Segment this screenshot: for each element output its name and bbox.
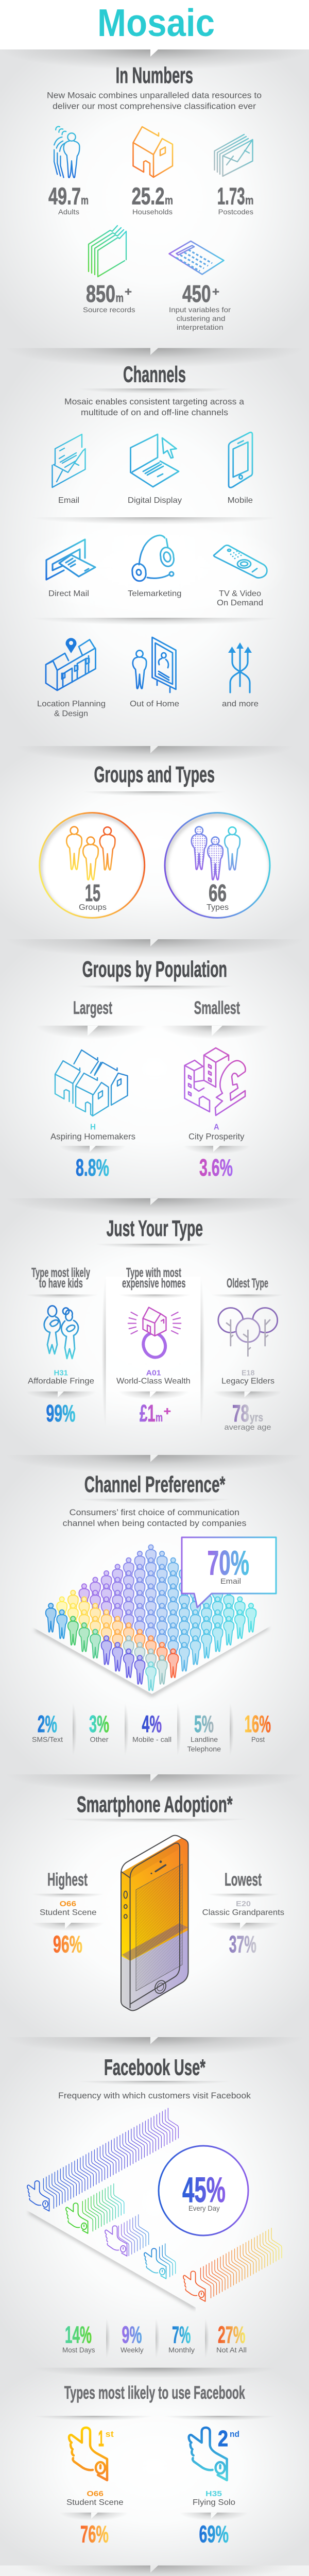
stat: source records <box>83 280 135 314</box>
code: h: H <box>90 1123 96 1132</box>
panel: just your type <box>0 1198 309 1455</box>
code: a01: A01 <box>146 1369 161 1378</box>
subheading <box>31 1266 90 1291</box>
subheading <box>122 1266 185 1291</box>
stat: households: Households <box>132 208 173 216</box>
label: tv and video on demand: TV & Video <box>219 589 261 598</box>
icon: three dotted people <box>192 827 240 880</box>
icon: thumb up blue <box>189 2428 227 2480</box>
subheading: Oldest Type <box>227 1276 268 1291</box>
number: 66: 66 <box>209 879 227 906</box>
label: tv and video on demand: On Demand <box>217 599 263 607</box>
rank: 2nd: 2 <box>218 2426 228 2451</box>
stat: adults: Adults <box>58 208 79 216</box>
panel: groups and types <box>0 746 309 940</box>
column: most expensive homes <box>116 1266 191 1427</box>
stat: source records: Source records <box>83 306 135 314</box>
intro text: channel when being contacted by companies <box>63 1518 246 1528</box>
stat: sms <box>32 1710 63 1743</box>
name: student scene: Student Scene <box>66 2498 124 2507</box>
title: Mosaic <box>97 1 215 44</box>
intro text: Frequency with which customers visit Facebook <box>58 2091 251 2100</box>
stat: not at all <box>216 2321 247 2354</box>
icon: household <box>133 127 173 177</box>
stat: mobile call: Mobile - call <box>132 1735 171 1743</box>
icon: folders <box>89 226 126 277</box>
intro text: New Mosaic combines unparalleled data resources to <box>47 91 262 100</box>
value: 99 percent: 99% <box>46 1400 75 1427</box>
icon: telemarketing <box>132 535 174 581</box>
stat: sms: 2% <box>38 1710 57 1737</box>
icon: direct mail <box>46 539 95 580</box>
icon: email <box>53 434 85 487</box>
stat: households: 25.2 <box>132 183 165 210</box>
value: 78 years: yrs <box>250 1411 263 1424</box>
code: h31: H31 <box>54 1369 68 1378</box>
stat: most days: 14% <box>65 2321 92 2348</box>
label: direct mail: Direct Mail <box>48 589 89 598</box>
icon: house on a ring <box>128 1308 181 1361</box>
subheading: lowest: Lowest <box>225 1870 262 1890</box>
subheading: Type most likely <box>31 1266 90 1280</box>
icon: three people <box>66 827 115 880</box>
column: largest <box>36 998 148 1181</box>
label: mobile: Mobile <box>228 496 253 505</box>
name: flying solo: Flying Solo <box>193 2498 235 2507</box>
value: 69 percent: 69% <box>199 2521 229 2548</box>
header: white title band <box>0 0 309 49</box>
label: location planning and design <box>37 700 106 718</box>
intro text: deliver our most comprehensive classification ever <box>53 101 256 111</box>
code: e18: E18 <box>242 1369 254 1378</box>
icon: digital display <box>131 434 179 487</box>
stat: source records: + <box>125 285 132 298</box>
intro text <box>47 91 262 111</box>
code: h35: H35 <box>205 2489 222 2498</box>
label: telemarketing: Telemarketing <box>128 589 181 598</box>
number: 15: 15 <box>85 879 100 906</box>
label: out of home: Out of Home <box>130 700 179 708</box>
value: 37 percent: 37% <box>229 1930 256 1957</box>
label: location planning and design: Location Planning <box>37 700 106 708</box>
panel: in numbers <box>0 49 309 348</box>
stat: other <box>89 1710 109 1743</box>
heading: channels: Channels <box>123 362 186 387</box>
name: affordable fringe: Affordable Fringe <box>28 1377 94 1386</box>
label: average age: average age <box>225 1423 271 1432</box>
stat: input variables: clustering and <box>176 314 226 323</box>
subheading: expensive homes <box>122 1276 185 1291</box>
stat: monthly <box>168 2321 195 2354</box>
panel: source note band <box>0 2566 309 2576</box>
stat: adults: 49.7 <box>48 183 81 210</box>
icon: calculator <box>169 241 224 274</box>
stat: input variables: 450 <box>182 280 211 307</box>
stat: most days <box>62 2321 95 2354</box>
code: o66: O66 <box>87 2489 104 2498</box>
icon: houses <box>55 1050 128 1116</box>
stat: postcodes <box>217 183 253 216</box>
subheading: smallest: Smallest <box>194 998 240 1018</box>
chart: every day thumbs bar <box>27 2108 178 2211</box>
name: student scene: Student Scene <box>40 1908 97 1917</box>
stat: landline <box>187 1710 221 1753</box>
label: email: Email <box>58 496 79 505</box>
stat: landline: Landline <box>191 1735 218 1743</box>
stat: post: Post <box>251 1735 265 1743</box>
icon: envelopes <box>214 134 252 176</box>
value: 96 percent: 96% <box>53 1930 82 1957</box>
stat: input variables: + <box>212 285 219 298</box>
stat: monthly: Monthly <box>168 2346 195 2354</box>
icon: adults <box>54 127 79 178</box>
label: location planning and design: & Design <box>54 709 88 718</box>
rank: 2nd: nd <box>230 2429 239 2439</box>
intro text: Mosaic enables consistent targeting across a <box>64 397 245 406</box>
column: most likely to have kids <box>26 1266 98 1427</box>
circle: 66 types <box>165 813 271 921</box>
value: 8.8 percent: 8.8% <box>76 1154 109 1181</box>
panel: smartphone adoption <box>0 1774 309 2037</box>
rank: 2nd <box>218 2426 239 2451</box>
chart: most days thumbs bar <box>66 2184 124 2233</box>
name: aspiring homemakers: Aspiring Homemakers <box>50 1132 135 1142</box>
name: world-class wealth: World-Class Wealth <box>116 1377 191 1386</box>
stat: postcodes: 1.73 <box>217 183 245 210</box>
value: 3.6 percent: 3.6% <box>199 1154 233 1181</box>
stat: postcodes: Postcodes <box>218 208 253 216</box>
circle: 45 percent every day: Every Day <box>188 2204 220 2212</box>
stat: post <box>244 1710 271 1743</box>
stat: landline: 5% <box>194 1710 214 1737</box>
stat: other: Other <box>90 1735 109 1743</box>
stat: other: 3% <box>89 1710 109 1737</box>
column: lowest <box>202 1870 284 1957</box>
chart: weekly thumbs bar <box>105 2215 149 2256</box>
stat: not at all: Not At All <box>216 2346 247 2354</box>
value: one million plus: + <box>164 1404 171 1418</box>
code: e20: E20 <box>236 1900 251 1908</box>
heading: groups and types: Groups and Types <box>94 762 215 787</box>
name: classic grandparents: Classic Grandparents <box>202 1908 284 1917</box>
stat: source records: 850 <box>86 280 115 307</box>
chart: monthly thumbs bar <box>144 2244 176 2279</box>
column: second <box>179 2426 248 2548</box>
subheading: largest: Largest <box>73 998 112 1018</box>
subheading: highest: Highest <box>47 1870 88 1890</box>
stat: not at all: 27% <box>218 2321 245 2348</box>
intro text: multitude of on and off-line channels <box>81 408 228 417</box>
stat: mobile call <box>132 1710 171 1743</box>
stat: input variables: interpretation <box>177 323 224 331</box>
subheading: to have kids <box>39 1276 83 1291</box>
icon: mobile <box>229 432 252 487</box>
icon: city and pound sign <box>184 1048 246 1115</box>
stat: weekly: Weekly <box>121 2346 144 2354</box>
subheading: Type with most <box>126 1266 181 1280</box>
stat: most days: Most Days <box>62 2346 95 2354</box>
stat: mobile call: 4% <box>142 1710 162 1737</box>
stat: weekly: 9% <box>122 2321 142 2348</box>
intro text <box>64 397 245 417</box>
stat: households: m <box>165 194 173 207</box>
circle: 45 percent every day: 45% <box>182 2170 226 2210</box>
circle: 15 groups <box>40 813 146 921</box>
value: one million plus: £1 <box>140 1400 156 1427</box>
label: and more: and more <box>222 700 259 708</box>
column: highest <box>31 1870 105 1957</box>
callout: 70 percent email <box>182 1537 276 1607</box>
callout: 70 percent email: Email <box>220 1577 241 1586</box>
name: city prosperity: City Prosperity <box>188 1132 245 1142</box>
column: oldest type <box>211 1276 283 1432</box>
column: first <box>59 2426 128 2548</box>
stat: input variables <box>169 280 231 331</box>
intro text: Consumers’ first choice of communication <box>70 1507 239 1517</box>
icon: parents with babies <box>44 1306 78 1359</box>
panel: groups by population <box>0 939 309 1198</box>
label: groups: Groups <box>79 903 107 912</box>
icon: and more arrows <box>228 642 252 692</box>
illustration: smartphone filled by percentage <box>118 1832 191 2010</box>
stat: source records: m <box>116 291 124 304</box>
icon: trees <box>218 1308 278 1356</box>
panel: types most likely to use facebook <box>0 2368 309 2566</box>
stat: postcodes: m <box>245 194 253 207</box>
code: a: A <box>214 1123 219 1132</box>
circle: 45 percent every day <box>159 2146 248 2235</box>
panel: channel preference <box>0 1455 309 1774</box>
panel: channels <box>0 348 309 746</box>
column: smallest <box>160 998 270 1181</box>
label: types: Types <box>207 903 229 912</box>
name: legacy elders: Legacy Elders <box>221 1377 274 1386</box>
icon: thumb up orange <box>69 2428 107 2480</box>
callout: 70 percent email: 70% <box>207 1544 249 1583</box>
stat: weekly <box>121 2321 144 2354</box>
stat: sms: SMS/Text <box>32 1735 63 1743</box>
stat: monthly: 7% <box>172 2321 191 2348</box>
heading: just your type: Just Your Type <box>107 1216 203 1241</box>
stat: input variables: Input variables for <box>169 306 231 314</box>
label: tv and video on demand <box>217 589 263 607</box>
value: 76 percent: 76% <box>80 2521 109 2548</box>
rank: 1st: st <box>106 2429 114 2439</box>
stat: post: 16% <box>244 1710 271 1737</box>
heading: channel preference: Channel Preference* <box>84 1472 226 1497</box>
icon: location planning <box>46 638 96 690</box>
icon: tv remote <box>214 545 267 578</box>
heading: in numbers: In Numbers <box>116 63 193 88</box>
chart: isometric grid of 100 people <box>46 1545 256 1690</box>
value: one million plus: m <box>156 1411 163 1424</box>
stat: landline: Telephone <box>187 1744 221 1753</box>
panel: facebook use <box>0 2037 309 2368</box>
value: 78 years: 78 <box>232 1400 249 1427</box>
stat: adults: m <box>81 194 89 207</box>
heading: facebook use: Facebook Use* <box>104 2055 206 2080</box>
code: o66: O66 <box>60 1900 76 1908</box>
chart: not at all thumbs bar <box>183 2228 282 2301</box>
label: digital display: Digital Display <box>128 496 182 505</box>
rank: 1st: 1 <box>98 2426 104 2451</box>
icon: out of home <box>133 637 176 692</box>
intro text <box>63 1507 246 1528</box>
